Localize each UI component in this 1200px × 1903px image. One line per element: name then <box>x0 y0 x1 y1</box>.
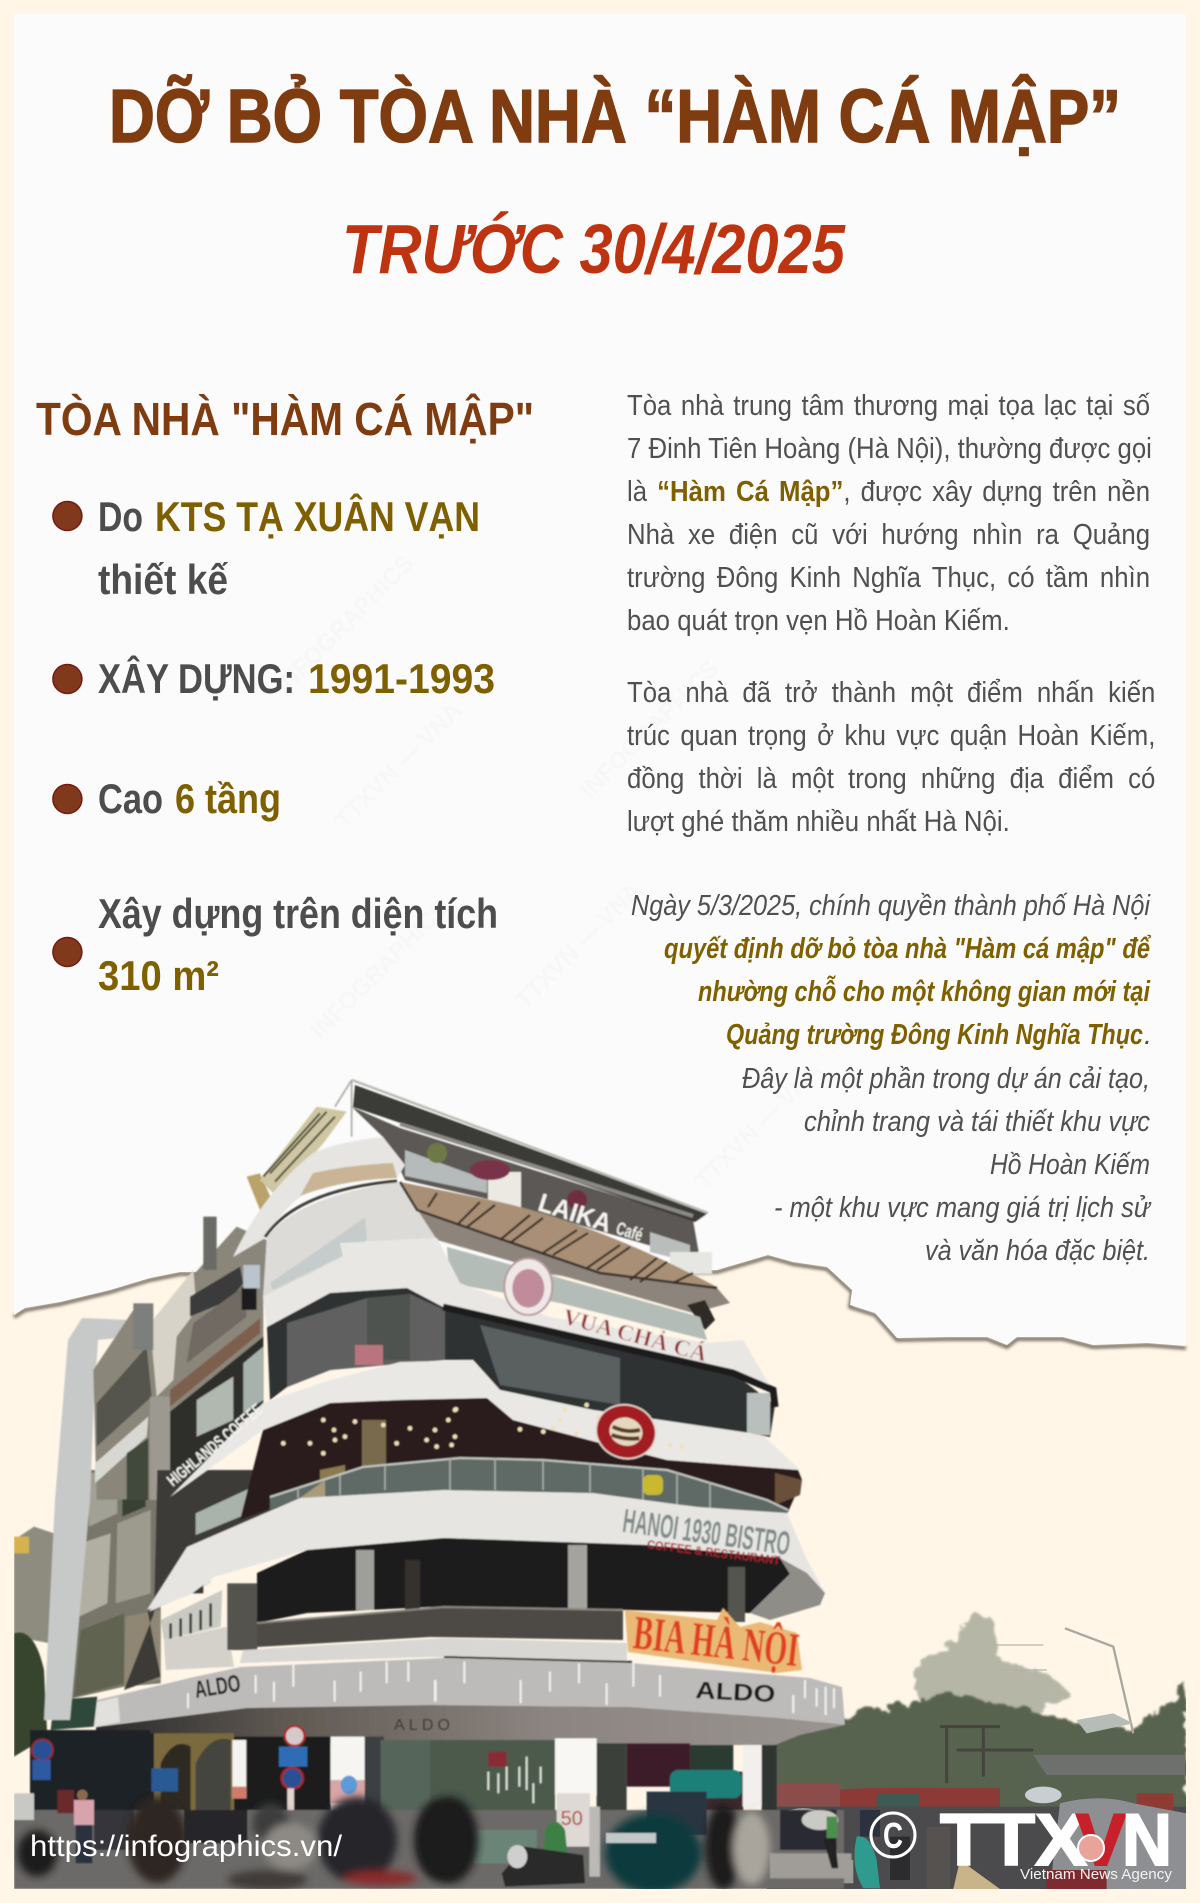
ground floor shops <box>28 1704 844 1812</box>
cafe awning <box>400 1182 730 1330</box>
Hanoi 1930 Bistro sign <box>622 1508 790 1566</box>
building: Ham Ca Map <box>14 1080 852 1893</box>
paragraph: 5/3/2025 decision: - một khu vực mang giá trị lịch sử <box>774 1192 1152 1224</box>
left panel heading: TÒA NHÀ "HÀM CÁ MẬP" <box>36 393 534 445</box>
second-floor glass <box>447 1247 707 1340</box>
icon: copyright <box>871 1813 915 1857</box>
paragraph: landmark: đồng thời là một trong những địa điểm có <box>627 763 1155 795</box>
paragraph: 5/3/2025 decision: chỉnh trang và tái thiết khu vực <box>804 1106 1150 1138</box>
ceiling lights <box>281 1403 684 1456</box>
ALDO signage band: ALDO <box>695 1677 776 1708</box>
Vua Cha Ca logo and sign <box>504 1258 711 1367</box>
small ALDO sign: ALDO <box>394 1717 450 1734</box>
paragraph: 5/3/2025 decision: Đây là một phần trong dự án cải tạo, <box>742 1063 1150 1095</box>
agency name: Vietnam News Agency <box>1020 1866 1172 1883</box>
TTXVN copyright logo <box>871 1800 1172 1883</box>
website url: https://infographics.vn/ <box>30 1830 343 1863</box>
left neighbours and side facade <box>14 1470 161 1757</box>
Hanoi 1930 Bistro sign: COFFEE & RESTAURANT <box>646 1537 782 1568</box>
Laika cafe sign: Café <box>614 1218 645 1245</box>
TTXVN wordmark <box>940 1800 1172 1881</box>
fact: architect: Do <box>98 493 143 540</box>
Highlands Coffee logo and wall sign: HIGHLANDS COFFEE <box>163 1400 266 1490</box>
fact: area <box>53 890 498 999</box>
upper side facade <box>93 1080 352 1500</box>
paragraph: location: Nhà xe điện cũ với hướng nhìn ra Quảng <box>627 519 1150 551</box>
fact: height: 6 tầng <box>175 775 281 822</box>
fact: construction years: XÂY DỰNG: <box>98 654 295 702</box>
fact: architect: KTS TẠ XUÂN VẠN <box>155 492 480 540</box>
street photo with the building <box>14 1080 1186 1893</box>
paragraph: 5/3/2025 decision <box>631 890 1152 1267</box>
white band fourth floor <box>147 1490 825 1610</box>
stone column <box>44 1318 130 1720</box>
fact: height: Cao <box>98 775 163 822</box>
icon: copyright: C <box>883 1815 903 1856</box>
white band third floor <box>170 1360 800 1497</box>
Laika cafe sign <box>537 1192 644 1242</box>
fact: area: 310 m² <box>98 952 219 999</box>
fact: height <box>53 775 281 822</box>
dark open floor <box>240 1538 825 1663</box>
glass tier <box>267 1288 775 1437</box>
paragraph: location: là “Hàm Cá Mập”, được xây dựng trên nền <box>627 476 1150 508</box>
paragraph: location <box>627 390 1152 637</box>
street with blurred traffic <box>14 1770 852 1893</box>
paragraph: 5/3/2025 decision: Hồ Hoàn Kiếm <box>990 1149 1150 1181</box>
torn paper background <box>14 14 1186 1348</box>
street with blurred traffic: 50 <box>561 1808 583 1830</box>
Bia Ha Noi sign: BIA HÀ NỘI <box>631 1605 802 1677</box>
TTXVN wordmark: N <box>1122 1800 1172 1881</box>
TTXVN wordmark: V <box>1076 1800 1126 1881</box>
Vua Cha Ca logo and sign: VUA CHẢ CÁ <box>560 1304 711 1367</box>
fact: construction years: 1991-1993 <box>308 655 495 702</box>
subtitle date: TRƯỚC 30/4/2025 <box>342 210 846 288</box>
paragraph: location: Tòa nhà trung tâm thương mại tọa lạc tại số <box>627 390 1150 422</box>
fact: area: Xây dựng trên diện tích <box>98 890 498 937</box>
faint watermarks <box>270 550 827 1194</box>
fact: architect <box>53 492 480 603</box>
paragraph: landmark: trúc quan trọng ở khu vực quận Hoàn Kiếm, <box>627 720 1155 752</box>
ALDO signage band <box>94 1658 845 1727</box>
cafe tier with lights <box>240 1398 802 1520</box>
Laika cafe sign: LAIKA <box>535 1187 616 1238</box>
paragraph: landmark: lượt ghé thăm nhiều nhất Hà Nội. <box>627 806 1010 838</box>
ALDO signage band: ALDO <box>193 1670 242 1704</box>
paragraph: location: trường Đông Kinh Nghĩa Thục, có tầm nhìn <box>627 562 1150 594</box>
fact: architect: thiết kế <box>98 556 229 603</box>
cafe railing <box>270 1458 788 1515</box>
Bia Ha Noi sign <box>625 1605 802 1677</box>
paragraph: location: 7 Đinh Tiên Hoàng (Hà Nội), thường được gọi <box>627 433 1152 465</box>
white top tier <box>233 1137 460 1297</box>
paragraph: 5/3/2025 decision: và văn hóa đặc biệt. <box>925 1235 1150 1267</box>
paragraph: 5/3/2025 decision: . <box>1144 1019 1152 1051</box>
white band second floor <box>263 1238 773 1390</box>
Highlands Coffee logo and wall sign <box>163 1398 662 1490</box>
roof <box>352 1080 712 1274</box>
paragraph: landmark <box>627 677 1155 838</box>
paragraph: landmark: Tòa nhà đã trở thành một điểm nhấn kiến <box>627 677 1155 709</box>
TTXVN wordmark: TTX <box>940 1800 1087 1881</box>
fact: construction years <box>53 654 495 702</box>
lower side facade <box>124 1470 301 1690</box>
Hanoi 1930 Bistro sign: HANOI 1930 BISTRO <box>621 1503 792 1563</box>
street scene right: trees, lamp, traffic <box>767 1613 1186 1889</box>
paragraph: location: bao quát trọn vẹn Hồ Hoàn Kiếm. <box>627 605 1010 637</box>
